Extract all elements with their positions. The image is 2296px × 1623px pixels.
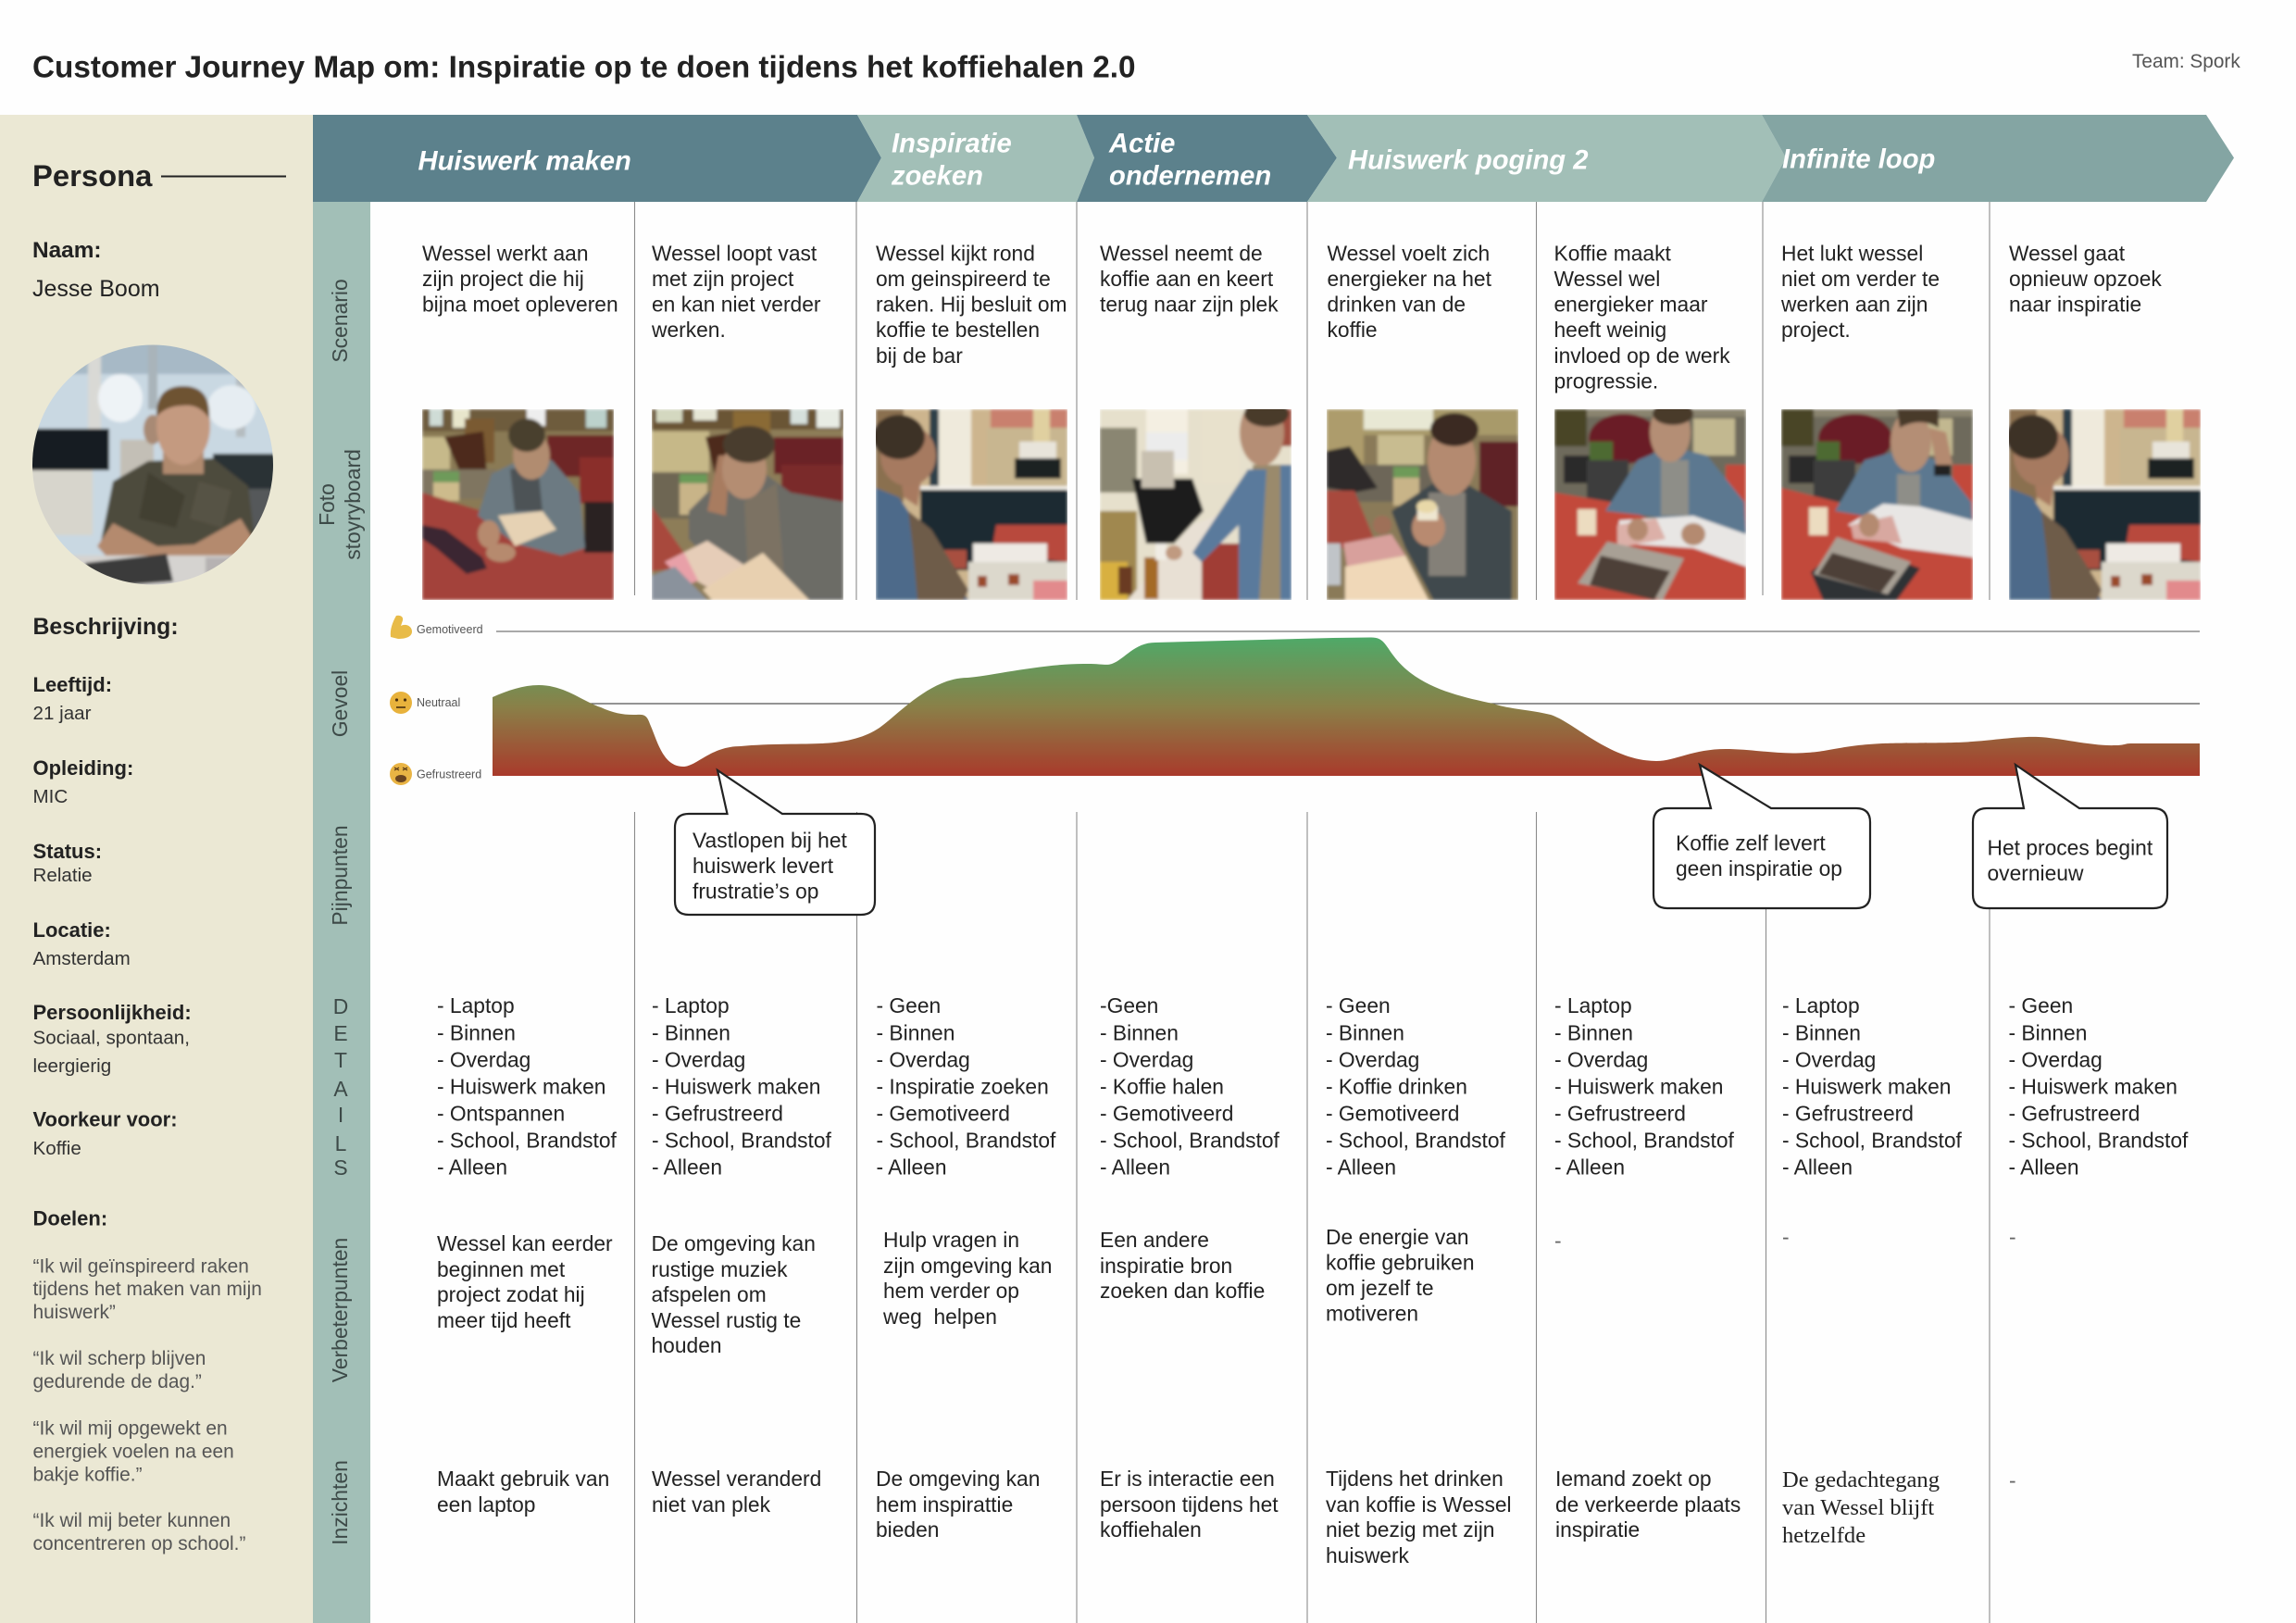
details column 4: - Alleen [1100, 1155, 1170, 1180]
scenario texts: werken aan zijn [1780, 293, 1928, 317]
phase: huiswerk poging 2: Huiswerk poging 2 [1348, 146, 1588, 176]
goals [33, 1207, 262, 1554]
storyboard photo 8 [2009, 409, 2201, 600]
personality [33, 1001, 192, 1077]
improvement points: zoeken dan koffie [1100, 1279, 1265, 1303]
improvement points: rustige muziek [652, 1257, 788, 1281]
pain point callout 1 [675, 770, 875, 915]
scenario texts [422, 241, 2162, 393]
age: 21 jaar [33, 703, 92, 724]
details column 4: - Overdag [1100, 1048, 1193, 1072]
details column 4: - School, Brandstof [1100, 1128, 1280, 1152]
improvement points: - [1782, 1225, 1790, 1249]
details column 3: - Inspiratie zoeken [876, 1074, 1049, 1098]
pain point callout 3: overnieuw [1987, 861, 2084, 885]
scenario texts: project. [1781, 318, 1851, 342]
details column 8: - School, Brandstof [2009, 1128, 2189, 1152]
details column 8: - Geen [2009, 993, 2073, 1017]
row label: inzichten: Inzichten [328, 1460, 352, 1545]
improvement points: om jezelf te [1326, 1276, 1434, 1300]
phase band [313, 115, 2234, 202]
improvement points: koffie gebruiken [1326, 1250, 1475, 1274]
personality: Sociaal, spontaan, [33, 1028, 190, 1048]
scenario texts: energieker maar [1554, 293, 1708, 317]
storyboard photo 2 [652, 409, 843, 600]
phase: actie ondernemen [1077, 115, 1337, 202]
details column 8: - Alleen [2009, 1155, 2079, 1180]
storyboard photo 4 [1100, 409, 1292, 600]
insights [437, 1467, 2016, 1567]
details column 1: - Overdag [437, 1048, 530, 1072]
improvement points: - [2009, 1225, 2016, 1249]
insights: hetzelfde [1782, 1523, 1866, 1548]
details column 6: - Huiswerk maken [1554, 1074, 1723, 1098]
icon: neutral face [390, 692, 412, 714]
improvement points: Een andere [1100, 1228, 1209, 1252]
insights: Er is interactie een [1100, 1467, 1275, 1491]
phase: inspiratie zoeken: Inspiratie [892, 130, 1012, 159]
phase: huiswerk poging 2 [1307, 115, 1786, 202]
goals: concentreren op school.” [33, 1533, 245, 1554]
insights: van koffie is Wessel [1326, 1492, 1512, 1517]
row label: details: A [333, 1077, 348, 1101]
row label: details: D [333, 994, 348, 1018]
insights: Iemand zoekt op [1555, 1467, 1712, 1491]
row label: pijnpunten: Pijnpunten [328, 825, 352, 926]
insights: De omgeving kan [876, 1467, 1040, 1491]
team label: Team: Spork [2132, 51, 2240, 72]
status [33, 840, 102, 886]
insights: Tijdens het drinken [1326, 1467, 1504, 1491]
scenario texts: Wessel loopt vast [652, 241, 817, 265]
goals: “Ik wil mij beter kunnen [33, 1510, 231, 1531]
details column 5: - Gemotiveerd [1326, 1102, 1459, 1126]
scenario texts: terug naar zijn plek [1100, 293, 1279, 317]
improvement points: - [1554, 1229, 1562, 1253]
persona photo [28, 343, 278, 593]
scenario texts: bij de bar [876, 343, 963, 368]
details column 3: - School, Brandstof [876, 1128, 1056, 1152]
phase: huiswerk maken [313, 115, 881, 202]
name [32, 238, 160, 302]
details column 1: - Alleen [437, 1155, 507, 1180]
improvement points: motiveren [1326, 1302, 1418, 1326]
scenario texts: Wessel wel [1554, 267, 1660, 291]
row label: details: E [333, 1021, 348, 1045]
row label: foto storyboard [315, 449, 365, 560]
details column 5: - Alleen [1326, 1155, 1396, 1180]
scenario texts: raken. Hij besluit om [876, 293, 1067, 317]
details column 1: - School, Brandstof [437, 1128, 618, 1152]
details column 7 [1782, 993, 1963, 1180]
scenario texts: Koffie maakt [1554, 241, 1671, 265]
name: Naam: [32, 238, 102, 263]
details column 2: - Alleen [652, 1155, 722, 1180]
improvement points: weg helpen [882, 1305, 997, 1329]
improvement points: afspelen om [652, 1282, 767, 1306]
age: Leeftijd: [33, 673, 112, 696]
preference: Voorkeur voor: [33, 1107, 178, 1131]
insights: de verkeerde plaats [1555, 1492, 1741, 1517]
insights: hem inspirattie [876, 1492, 1013, 1517]
row label: foto storyboard: Foto [315, 483, 339, 526]
insights: Wessel veranderd [652, 1467, 821, 1491]
location: Locatie: [33, 918, 111, 942]
details column 7: - Gefrustreerd [1782, 1102, 1914, 1126]
scenario texts: en kan niet verder [652, 293, 821, 317]
insights: bieden [876, 1517, 939, 1542]
improvement points: Wessel rustig te [652, 1308, 801, 1332]
details column 1: - Huiswerk maken [437, 1074, 605, 1098]
location [33, 918, 131, 969]
pain point callout 1: Vastlopen bij het [693, 828, 848, 852]
details column 8: - Binnen [2009, 1020, 2087, 1044]
details column 8: - Huiswerk maken [2009, 1074, 2177, 1098]
status: Relatie [33, 865, 93, 886]
scenario texts: Wessel werkt aan [422, 241, 589, 265]
details column 3: - Gemotiveerd [876, 1102, 1010, 1126]
details column 2: - Laptop [652, 993, 730, 1017]
scenario texts: koffie te bestellen [876, 318, 1040, 342]
details column 4: -Geen [1100, 993, 1158, 1017]
goals: tijdens het maken van mijn [33, 1279, 262, 1300]
improvement points: meer tijd heeft [437, 1308, 571, 1332]
preference [33, 1107, 178, 1159]
details column 5: - School, Brandstof [1326, 1128, 1506, 1152]
scenario texts: Wessel kijkt rond [876, 241, 1035, 265]
age [33, 673, 112, 724]
scenario texts: heeft weinig [1554, 318, 1666, 342]
insights: een laptop [437, 1492, 535, 1517]
goals: “Ik wil geïnspireerd raken [33, 1255, 249, 1278]
insights: - [2009, 1468, 2016, 1492]
scenario texts: zijn project die hij [422, 267, 584, 291]
description heading: Beschrijving: [33, 615, 179, 640]
scenario texts: Wessel neemt de [1100, 241, 1263, 265]
details column 3: - Binnen [876, 1020, 955, 1044]
pain point callout 3 [1973, 765, 2167, 908]
details column 2: - Binnen [652, 1020, 730, 1044]
details column 5 [1326, 993, 1506, 1180]
scenario texts: met zijn project [652, 267, 794, 291]
label: gemotiveerd: Gemotiveerd [417, 623, 483, 636]
row label: details: T [334, 1048, 347, 1072]
insights: inspiratie [1555, 1517, 1640, 1542]
details column 1: - Ontspannen [437, 1102, 565, 1126]
storyboard photo 5 [1327, 409, 1518, 600]
row label: details: S [333, 1155, 348, 1180]
details column 6: - School, Brandstof [1554, 1128, 1735, 1152]
details column 4: - Gemotiveerd [1100, 1102, 1233, 1126]
improvement points: beginnen met [437, 1257, 566, 1281]
goals: “Ik wil scherp blijven [33, 1348, 206, 1369]
details column 6 [1554, 993, 1735, 1180]
scenario texts: Wessel gaat [2009, 241, 2126, 265]
details column 7: - Binnen [1782, 1020, 1861, 1044]
scenario texts: koffie [1328, 318, 1378, 342]
goals: energiek voelen na een [33, 1441, 234, 1463]
row label: details [333, 994, 348, 1180]
insights: niet bezig met zijn [1326, 1517, 1494, 1542]
insights: De gedachtegang [1782, 1467, 1940, 1492]
icon: flexed arm [391, 616, 412, 639]
storyboard photo 7 [1781, 409, 1973, 600]
details column 4: - Koffie halen [1100, 1074, 1224, 1098]
insights: Maakt gebruik van [437, 1467, 609, 1491]
goals: Doelen: [33, 1207, 107, 1230]
details column 5: - Koffie drinken [1326, 1074, 1467, 1098]
details column 1: - Binnen [437, 1020, 516, 1044]
phase: infinite loop [1762, 115, 2234, 202]
details column 2: - Gefrustreerd [652, 1102, 783, 1126]
phase: infinite loop: Infinite loop [1782, 144, 1935, 174]
phase: actie ondernemen: Actie [1108, 130, 1175, 159]
details column 2: - Overdag [652, 1048, 745, 1072]
details column 6: - Laptop [1554, 993, 1632, 1017]
details column 6: - Gefrustreerd [1554, 1102, 1686, 1126]
scenario texts: niet om verder te [1781, 267, 1940, 291]
details column 7: - Overdag [1782, 1048, 1876, 1072]
emotion chart [390, 616, 2200, 785]
improvement points: Hulp vragen in [883, 1228, 1019, 1252]
details column 7: - Laptop [1782, 993, 1860, 1017]
details column 5: - Binnen [1326, 1020, 1404, 1044]
personality: Persoonlijkheid: [33, 1001, 192, 1024]
improvement points: De energie van [1326, 1225, 1469, 1249]
details column 1: - Laptop [437, 993, 515, 1017]
details column 8: - Overdag [2009, 1048, 2103, 1072]
education: MIC [33, 786, 68, 807]
scenario texts: progressie. [1554, 368, 1658, 393]
insights: koffiehalen [1100, 1517, 1202, 1542]
details column 3: - Alleen [876, 1155, 947, 1180]
goals: huiswerk” [33, 1302, 116, 1323]
scenario texts: bijna moet opleveren [422, 293, 618, 317]
phase: actie ondernemen: ondernemen [1109, 161, 1271, 191]
scenario texts: opnieuw opzoek [2009, 267, 2162, 291]
pain point callout 2 [1653, 765, 1870, 908]
label: gefrustreerd: Gefrustreerd [417, 768, 481, 781]
details column 1 [437, 993, 618, 1180]
details column 8: - Gefrustreerd [2009, 1102, 2140, 1126]
insights: huiswerk [1326, 1543, 1410, 1567]
scenario texts: Het lukt wessel [1781, 241, 1923, 265]
improvement points [437, 1225, 2016, 1357]
title: Customer Journey Map om: Inspiratie op te doen tijdens het koffiehalen 2.0 [32, 50, 1135, 85]
details column 6: - Alleen [1554, 1155, 1625, 1180]
row label: details: L [335, 1131, 346, 1155]
details column 3 [876, 993, 1056, 1180]
scenario texts: naar inspiratie [2009, 293, 2141, 317]
phase: inspiratie zoeken: zoeken [891, 161, 983, 191]
details column 2 [652, 993, 832, 1180]
improvement points: inspiratie bron [1100, 1254, 1232, 1278]
improvement points: zijn omgeving kan [883, 1254, 1052, 1278]
scenario texts: energieker na het [1328, 267, 1492, 291]
details column 2: - Huiswerk maken [652, 1074, 820, 1098]
pain point callout 3: Het proces begint [1987, 835, 2153, 859]
scenario texts: invloed op de werk [1554, 343, 1730, 368]
details column 2: - School, Brandstof [652, 1128, 832, 1152]
details column 6: - Binnen [1554, 1020, 1633, 1044]
status: Status: [33, 840, 102, 863]
details column 7: - School, Brandstof [1782, 1128, 1963, 1152]
goals: gedurende de dag.” [33, 1371, 202, 1392]
storyboard photo 1 [422, 409, 614, 600]
details column 7: - Alleen [1782, 1155, 1853, 1180]
emotion area [493, 637, 2200, 776]
phase: huiswerk maken: Huiswerk maken [418, 146, 631, 176]
row label: details: I [338, 1103, 343, 1127]
panel: persona sidebar [0, 115, 313, 1623]
icon: frustrated face [390, 763, 412, 785]
improvement points: project zodat hij [437, 1282, 585, 1306]
pain point callout 1: frustratie’s op [693, 880, 818, 904]
improvement points: houden [652, 1333, 722, 1357]
location: Amsterdam [33, 948, 131, 969]
storyboard photo 6 [1554, 409, 1746, 600]
preference: Koffie [33, 1138, 81, 1159]
details column 5: - Overdag [1326, 1048, 1419, 1072]
name: Jesse Boom [32, 276, 160, 302]
scenario texts: drinken van de [1328, 293, 1466, 317]
improvement points: Wessel kan eerder [437, 1231, 613, 1255]
scenario texts: koffie aan en keert [1100, 267, 1274, 291]
row label: gevoel: Gevoel [328, 670, 352, 737]
panel: row label stripe [313, 202, 370, 1623]
label: neutraal: Neutraal [417, 696, 460, 709]
row label: scenario: Scenario [328, 279, 352, 363]
details column 3: - Overdag [876, 1048, 970, 1072]
insights: niet van plek [652, 1492, 771, 1517]
row label: verbeterpunten: Verbeterpunten [328, 1238, 352, 1382]
scenario texts: om geinspireerd te [876, 267, 1051, 291]
details column 3: - Geen [876, 993, 941, 1017]
goals: “Ik wil mij opgewekt en [33, 1418, 228, 1439]
scenario texts: Wessel voelt zich [1328, 241, 1490, 265]
phase: inspiratie zoeken [857, 115, 1094, 202]
improvement points: hem verder op [883, 1279, 1019, 1303]
improvement points: De omgeving kan [652, 1231, 816, 1255]
pain point callout 2: geen inspiratie op [1676, 856, 1842, 880]
details column 6: - Overdag [1554, 1048, 1648, 1072]
pain point callout 1: huiswerk levert [693, 854, 834, 878]
row label: foto storyboard: stoyryboard [341, 449, 365, 560]
details column 8 [2009, 993, 2189, 1180]
details column 4 [1100, 993, 1280, 1180]
storyboard photo 3 [876, 409, 1067, 600]
scenario texts: werken. [651, 318, 726, 342]
pain point callout 2: Koffie zelf levert [1676, 831, 1826, 855]
education [33, 756, 133, 807]
details column 7: - Huiswerk maken [1782, 1074, 1951, 1098]
persona heading: Persona [32, 158, 153, 193]
education: Opleiding: [33, 756, 133, 780]
details column 5: - Geen [1326, 993, 1391, 1017]
goals: bakje koffie.” [33, 1465, 143, 1485]
insights: persoon tijdens het [1100, 1492, 1279, 1517]
personality: leergierig [33, 1055, 111, 1077]
insights: van Wessel blijft [1782, 1495, 1934, 1520]
details column 4: - Binnen [1100, 1020, 1179, 1044]
